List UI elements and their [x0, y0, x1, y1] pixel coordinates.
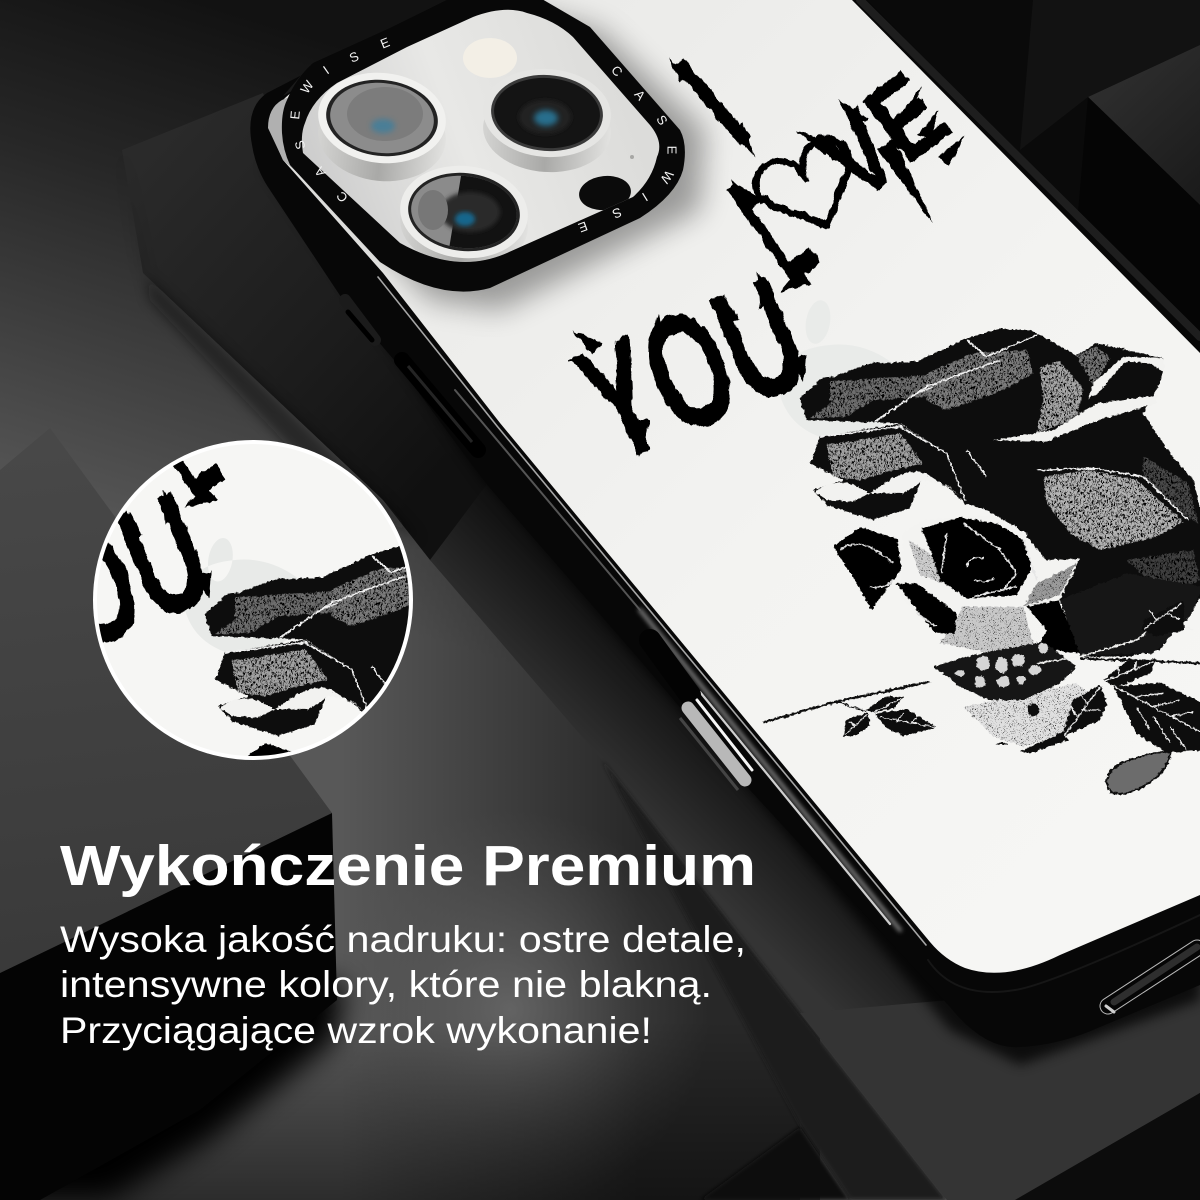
- window: [302, 10, 659, 262]
- printed art: LOVE with heart: [702, 49, 970, 314]
- printed art: YOU: YOU: [554, 242, 830, 498]
- ring lettering right: A: [631, 87, 649, 103]
- microphone: [630, 155, 634, 159]
- soft contact shadow: [262, 165, 1200, 1065]
- ring lettering right: [576, 63, 680, 236]
- lens bottom: [400, 166, 523, 262]
- printed art: I: I: [649, 31, 777, 175]
- power button: [650, 640, 752, 790]
- charging port: [1106, 947, 1197, 1012]
- ring lettering left: E: [378, 34, 392, 52]
- printed art: LOVE with heart: L: [702, 138, 843, 314]
- lower left block top face: [0, 428, 332, 973]
- black ring: [282, 0, 685, 292]
- ring lettering right: S: [610, 204, 624, 222]
- apple logo ghost: [780, 304, 892, 436]
- ring lettering left: W: [297, 77, 317, 96]
- ring lettering left: S: [292, 139, 308, 151]
- description: Przyciągające wzrok wykonanie!: [60, 1009, 652, 1051]
- ring lettering left: I: [320, 63, 332, 77]
- volume button: [402, 360, 478, 450]
- description: [60, 918, 746, 1051]
- camera bump: [282, 0, 685, 292]
- ring shadow on back: [300, 10, 705, 310]
- phone in black case: [250, 0, 1200, 1065]
- floor shading: [340, 300, 820, 1200]
- ring lettering left: A: [311, 164, 329, 180]
- grey strip at corner: [268, 96, 345, 215]
- ring lettering right: E: [664, 146, 680, 155]
- white back panel: [271, 0, 1200, 973]
- magnified lettering: L: [107, 354, 248, 530]
- printed art: LOVE with heart: VE: [795, 49, 970, 225]
- ring lettering right: C: [608, 63, 626, 79]
- magnified lettering: [98, 460, 226, 643]
- lens top left: [318, 72, 446, 182]
- rose and skull artwork: [763, 328, 1200, 794]
- ring lettering right: W: [657, 168, 677, 187]
- lidar sensor: [579, 176, 631, 210]
- printed art: LOVE with heart: ♡: [727, 107, 896, 277]
- top right dark area: [780, 0, 1200, 420]
- heading: Wykończenie Premium: [60, 834, 756, 898]
- top right block top face: [1088, 45, 1200, 205]
- silver rim reflections: [378, 0, 1200, 992]
- ring lettering left: C: [333, 189, 351, 205]
- central block: [122, 93, 720, 780]
- ring lettering right: E: [576, 218, 590, 236]
- ring lettering left: E: [287, 110, 303, 120]
- ring lettering left: S: [347, 48, 361, 66]
- ghost logo in circle: [186, 538, 298, 652]
- description: intensywne kolory, które nie blakną.: [60, 963, 712, 1005]
- ring lettering right: I: [639, 190, 651, 204]
- lower left block front face: [0, 813, 345, 1200]
- magnified rose: [204, 546, 409, 756]
- case body silhouette: [250, 0, 1200, 1047]
- side switch: [345, 300, 375, 340]
- lens top right: [483, 74, 603, 172]
- dark band beside phone: [430, 440, 1200, 1200]
- ring lettering left: [287, 34, 392, 205]
- description: Wysoka jakość nadruku: ostre detale,: [60, 918, 746, 960]
- flash: [463, 38, 517, 78]
- zoom circle callout: [93, 440, 413, 760]
- ring lettering right: S: [653, 112, 671, 128]
- lower right floor: [800, 960, 1200, 1200]
- floor highlight: [300, 800, 720, 1200]
